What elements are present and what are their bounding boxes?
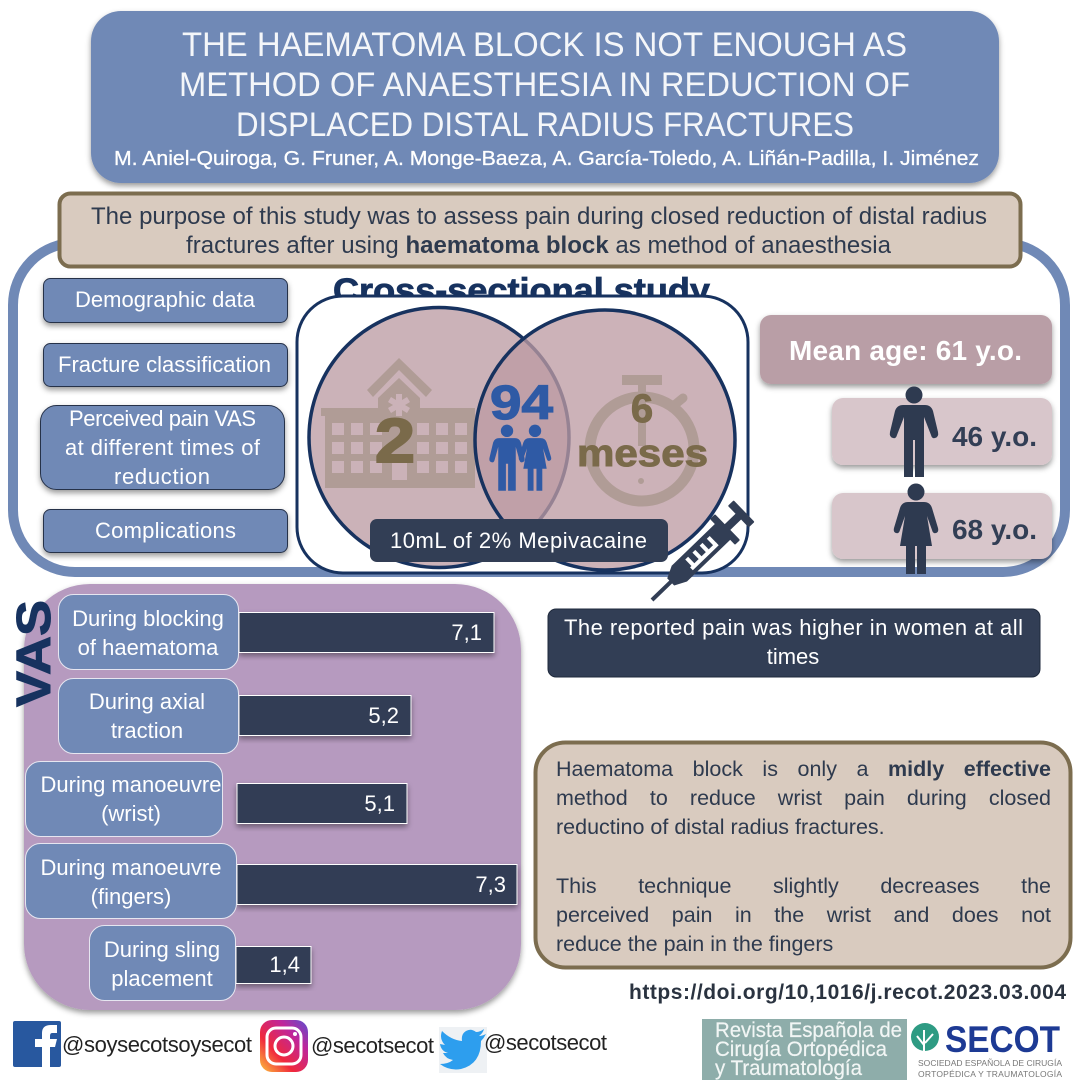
venn diagram <box>309 308 735 570</box>
finding: pain in women: times <box>767 644 819 669</box>
mean age: Mean age: 61 y.o. <box>789 335 1022 366</box>
bar: manoeuvre wrist <box>237 784 407 824</box>
social media footer: @secotsecot <box>484 1030 607 1055</box>
perceived pain: Perceived pain VAS <box>69 406 256 431</box>
women mean age <box>832 484 1052 574</box>
conclusion text <box>556 757 1051 956</box>
perceived pain <box>40 406 284 490</box>
panel: VAS chart <box>24 584 521 1010</box>
icon: hospital <box>321 358 475 488</box>
journal logo <box>702 1019 907 1080</box>
number of hospitals: 2 <box>375 407 415 476</box>
SECOT logo: SECOT <box>945 1019 1060 1060</box>
months of follow-up: meses <box>577 433 708 475</box>
months of follow-up <box>577 387 708 475</box>
label: manoeuvre wrist <box>26 762 222 836</box>
bar: manoeuvre wrist: 5,1 <box>364 791 395 816</box>
SECOT logo: ORTOPÉDICA Y TRAUMATOLOGÍA <box>918 1069 1062 1079</box>
women mean age: 68 y.o. <box>952 514 1037 545</box>
men mean age: 46 y.o. <box>952 421 1037 452</box>
icon: facebook <box>13 1021 61 1067</box>
label: sling: placement <box>111 966 213 991</box>
list: collected data <box>40 278 288 552</box>
journal logo: Cirugía Ortopédica <box>715 1038 887 1061</box>
fracture classification <box>44 344 288 386</box>
label: blocking: During blocking <box>72 606 224 631</box>
icon: stopwatch <box>590 380 694 501</box>
study frame <box>297 296 748 573</box>
icon: syringe <box>639 498 757 613</box>
axis title: VAS: VAS <box>8 600 61 707</box>
complications <box>44 510 288 552</box>
perceived pain: at different times of <box>65 435 261 460</box>
icon: instagram <box>260 1020 308 1072</box>
title panel <box>91 11 999 183</box>
SECOT logo <box>911 1019 1062 1079</box>
doi: https://doi.org/10,1016/j.recot.2023.03.004 <box>629 981 1066 1004</box>
purpose box: fractures after using haematoma block as method of anaesthesia <box>186 232 892 259</box>
conclusion text: reduce the pain in the fingers <box>556 932 833 956</box>
conclusion text: Haematoma block is only a midly effective <box>556 757 1051 781</box>
heading: cross-sectional study: Cross-sectional study <box>333 272 710 310</box>
men mean age <box>832 386 1052 477</box>
complications: Complications <box>95 518 236 543</box>
bar: manoeuvre fingers <box>237 864 517 904</box>
bar: sling <box>236 946 311 984</box>
bar: blocking: 7,1 <box>451 620 482 645</box>
icon: couple <box>489 425 551 491</box>
mepivacaine label <box>370 519 668 562</box>
social media footer: @soysecotsoysecot <box>62 1032 252 1057</box>
circle: follow-up <box>475 310 735 570</box>
label: manoeuvre wrist: During manoeuvre <box>41 772 221 797</box>
label: axial traction: During axial <box>89 689 205 714</box>
demographic data <box>44 278 288 322</box>
patient count: 94 <box>490 377 553 430</box>
conclusion text: perceived pain in the wrist and does not <box>556 903 1051 927</box>
fracture classification: Fracture classification <box>58 352 271 377</box>
authors: M. Aniel-Quiroga, G. Fruner, A. Monge-Baeza, A. García-Toledo, A. Liñán-Padilla, I. Jiménez <box>114 148 979 170</box>
title: DISPLACED DISTAL RADIUS FRACTURES <box>236 106 854 144</box>
journal logo: Revista Española de <box>715 1019 902 1042</box>
bar: sling: 1,4 <box>269 952 300 977</box>
panel: methods frame <box>13 243 1065 572</box>
label: sling: During sling <box>104 937 220 962</box>
label: manoeuvre wrist: (wrist) <box>101 801 161 826</box>
purpose box <box>60 194 1020 266</box>
perceived pain: reduction <box>114 464 210 489</box>
icon: man <box>890 386 938 477</box>
label: manoeuvre fingers <box>26 844 236 918</box>
circle: centres <box>309 308 569 568</box>
icon: twitter <box>439 1027 487 1073</box>
social media footer <box>13 1020 607 1073</box>
mean age <box>760 315 1052 384</box>
mepivacaine label: 10mL of 2% Mepivacaine <box>390 528 647 553</box>
months of follow-up: 6 <box>631 387 653 431</box>
label: blocking <box>58 594 238 670</box>
label: manoeuvre fingers: (fingers) <box>91 884 171 909</box>
journal logo: y Traumatología <box>715 1057 862 1080</box>
label: sling <box>90 926 236 1000</box>
social media footer: @secotsecot <box>311 1033 434 1058</box>
finding: pain in women <box>548 609 1040 677</box>
icon: woman <box>894 484 938 574</box>
title: METHOD OF ANAESTHESIA IN REDUCTION OF <box>179 66 910 104</box>
bar: manoeuvre fingers: 7,3 <box>475 872 506 897</box>
icon: tree <box>911 1023 939 1052</box>
demographic data: Demographic data <box>75 287 256 312</box>
conclusion text: This technique slightly decreases the <box>556 874 1051 898</box>
label: manoeuvre fingers: During manoeuvre <box>41 855 221 880</box>
bar: axial traction <box>239 696 411 736</box>
conclusion box <box>536 742 1070 968</box>
title: THE HAEMATOMA BLOCK IS NOT ENOUGH AS <box>182 26 907 64</box>
bar: blocking <box>239 612 494 652</box>
bar: axial traction: 5,2 <box>368 703 399 728</box>
purpose box: The purpose of this study was to assess pain during closed reduction of distal radius <box>91 203 987 230</box>
label: axial traction: traction <box>111 718 183 743</box>
conclusion text: method to reduce wrist pain during closed <box>556 786 1051 810</box>
label: axial traction <box>58 678 238 754</box>
finding: pain in women: The reported pain was higher in women at all <box>564 615 1023 640</box>
title <box>179 26 910 144</box>
conclusion text: reductino of distal radius fractures. <box>556 815 885 839</box>
SECOT logo: SOCIEDAD ESPAÑOLA DE CIRUGÍA <box>918 1058 1062 1068</box>
label: blocking: of haematoma <box>78 635 219 660</box>
